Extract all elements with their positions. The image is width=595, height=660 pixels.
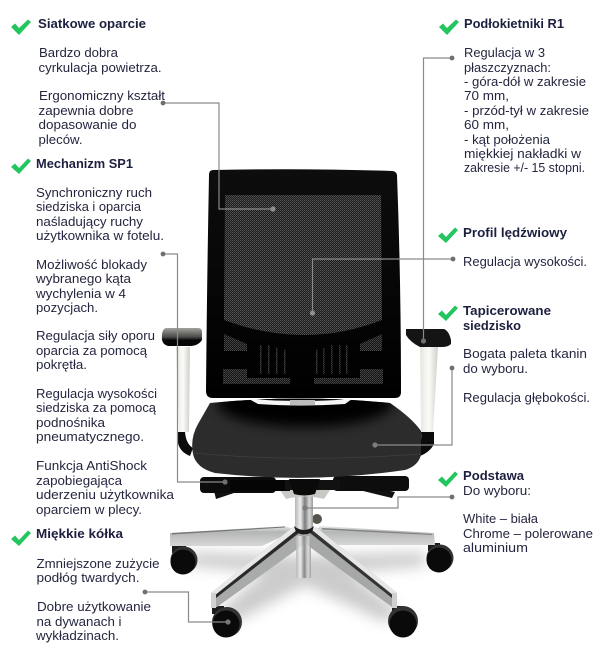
leader: lumbar [310,257,455,316]
text block: Do wyboru: [463,483,531,498]
text block: aluminium [463,540,528,555]
text block: na dywanach i [36,614,122,629]
heading: siedzisko [463,318,521,333]
mesh lumbar panels [223,334,383,384]
text block: podnośnika [36,415,106,430]
leader: mechanism lever [161,252,228,485]
text block: Regulacja wysokości [36,386,157,401]
chair illustration [162,169,454,637]
text block: zapobiegająca [36,473,123,488]
mesh upper [224,195,382,335]
text block: naśladujący ruchy [36,214,144,229]
text block: Możliwość blokady [36,257,148,272]
text block [464,45,589,175]
text block: oparcia za pomocą [36,343,148,358]
text block [463,483,593,555]
leader: base [302,495,454,511]
section: Podłokietniki R1 [439,16,589,175]
text block [35,185,175,517]
text block: oparciem w plecy. [36,502,142,517]
tilt mechanism and levers [200,476,409,499]
section: Profil lędźwiowy [438,225,587,269]
caster: back left [170,545,198,574]
section: Tapicerowane siedzisko [438,303,590,405]
icon: check [438,306,458,321]
text block: Chrome – polerowane [463,526,593,541]
heading: Podłokietniki R1 [464,16,564,31]
text block: Regulacja wysokości. [463,254,587,269]
text block: - przód-tył w zakresie [464,103,589,118]
heading: Podstawa [463,468,525,483]
front left leg [211,527,305,607]
section: Mechanizm SP1 [11,156,175,517]
text block: pleców. [38,132,82,147]
text block [38,45,165,147]
heading: Miękkie kółka [36,526,124,541]
backrest [206,169,401,398]
leader: armrest [421,56,454,344]
right arm [406,329,451,456]
section: Siatkowe oparcie [11,16,165,147]
heading: Profil lędźwiowy [463,225,568,240]
text block: Bogata paleta tkanin [463,346,587,361]
text block: dopasowanie do [38,117,136,132]
text block: Synchroniczny ruch [36,185,152,200]
leader: casters [143,590,231,625]
icon: check [438,472,458,487]
text block: zakresie +/- 15 stopni. [464,160,585,175]
text block: do wyboru. [463,361,528,376]
text block: Regulacja głębokości. [463,390,590,405]
text block: - kąt położenia [464,132,551,147]
text block: pneumatycznego. [36,429,144,444]
five-star base [170,496,435,608]
text block [463,346,590,405]
heading [463,303,551,333]
text block: 60 mm, [464,117,509,132]
text block: pokrętła. [36,357,87,372]
heading: Siatkowe oparcie [38,16,146,31]
text block: 70 mm, [464,88,509,103]
text block: podłóg twardych. [36,570,140,585]
seat [192,398,421,478]
section: Miękkie kółka [11,526,160,643]
caster: front right [388,606,418,638]
text block: wybranego kąta [35,271,132,286]
section: Podstawa [438,468,593,555]
text block: siedziska i oparcia [36,199,142,214]
text block: Dobre użytkowanie [37,599,151,614]
icon: check [11,158,31,174]
text block: zapewnia dobre [38,103,134,118]
text block: użytkownika w fotelu. [36,228,164,243]
text block: White – biała [463,511,539,526]
text block: wykładzinach. [35,628,119,643]
left arm [162,328,202,456]
caster: front left [212,606,242,638]
text block: cyrkulacja powietrza. [38,60,162,75]
text block: - góra-dół w zakresie [464,74,586,89]
white strip under backrest [249,399,352,406]
text block: pozycjach. [36,300,98,315]
text block: uderzeniu użytkownika [36,487,175,502]
heading: Tapicerowane [463,303,551,318]
leader: backrest mesh [161,101,276,212]
front right leg [305,527,397,607]
leader: seat [372,366,454,448]
heading: Mechanizm SP1 [36,156,133,171]
text block: Zmniejszone zużycie [36,556,160,571]
icon: check [11,530,31,546]
text block [35,556,160,643]
text block: Regulacja siły oporu [36,328,155,343]
text block: wychylenia w 4 [35,286,126,301]
text block: Ergonomiczny kształt [39,88,165,103]
icon: check [11,20,31,35]
text block: Funkcja AntiShock [36,458,148,473]
text block: miękkiej nakładki w [464,146,582,161]
caster: back right [426,543,454,572]
text block: Bardzo dobra [39,45,119,60]
icon: check [439,20,459,35]
text block: Regulacja w 3 [464,45,545,60]
text block: siedziska za pomocą [36,400,157,415]
text block: płaszczyznach: [464,60,551,75]
floor shadow [190,552,425,622]
icon: check [438,228,458,243]
